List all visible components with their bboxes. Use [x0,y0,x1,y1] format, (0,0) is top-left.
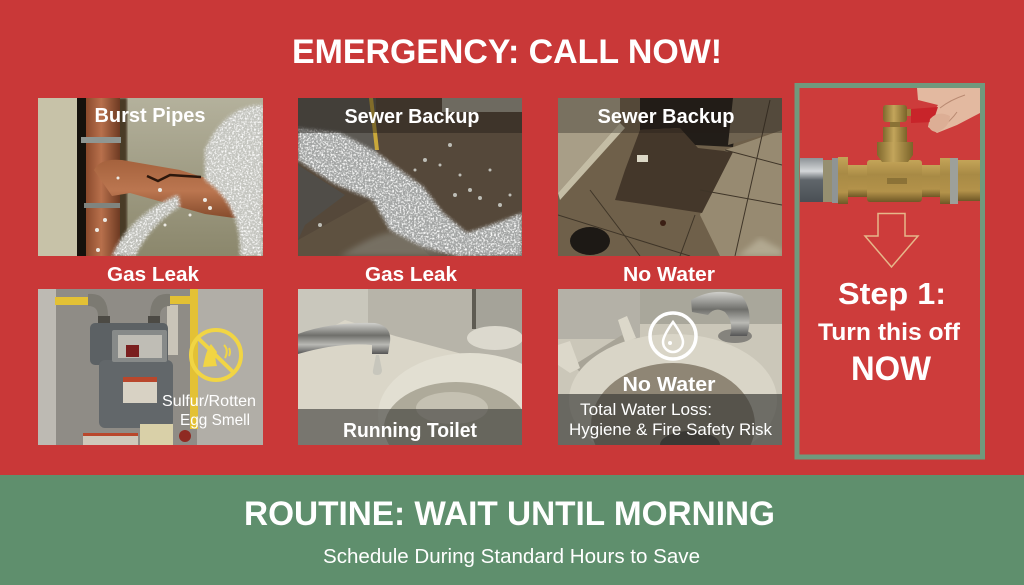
label: gas leak (left): Gas Leak [107,264,200,286]
text: step 1 instructions [818,276,961,388]
text: sulfur smell: Sulfur/Rotten [162,393,256,410]
heading: routine: ROUTINE: WAIT UNTIL MORNING [244,495,775,533]
text: sulfur smell: Egg Smell [180,412,250,429]
text: sulfur smell [162,393,256,429]
panel: gas meter photo [38,289,263,445]
panel: step 1 border [797,86,982,457]
text: schedule subline: Schedule During Standard Hours to Save [323,546,700,568]
panel: sewer backup flood photo [298,98,522,256]
panel: empty sink photo [558,289,782,445]
icon: no smell warning [191,330,241,380]
text: step 1 instructions: Turn this off [818,319,961,346]
label: no water: No Water [623,264,715,286]
panel: burst pipes photo [38,98,263,256]
text: step 1 instructions: Step 1: [838,276,946,311]
text: total water loss [569,400,772,439]
text: total water loss: Total Water Loss: [580,400,712,419]
label: sewer backup (centre): Sewer Backup [344,106,480,128]
label: gas leak (centre): Gas Leak [365,264,458,286]
text: total water loss: Hygiene & Fire Safety Risk [569,420,772,439]
arrow: down outline [865,214,918,267]
title: EMERGENCY: CALL NOW! [292,33,722,71]
panel: sewer backup floor photo [558,98,782,256]
label: no water overlay: No Water [622,374,716,396]
icon: shutoff valve [800,88,980,204]
label: burst pipes: Burst Pipes [94,105,206,127]
panel: dripping faucet and toilet photo [298,289,522,445]
label: running toilet: Running Toilet [343,420,477,442]
label: sewer backup (right): Sewer Backup [598,106,734,128]
text: step 1 instructions: NOW [851,350,932,388]
icon: water drop [650,313,696,359]
panel: routine band [0,475,1024,585]
